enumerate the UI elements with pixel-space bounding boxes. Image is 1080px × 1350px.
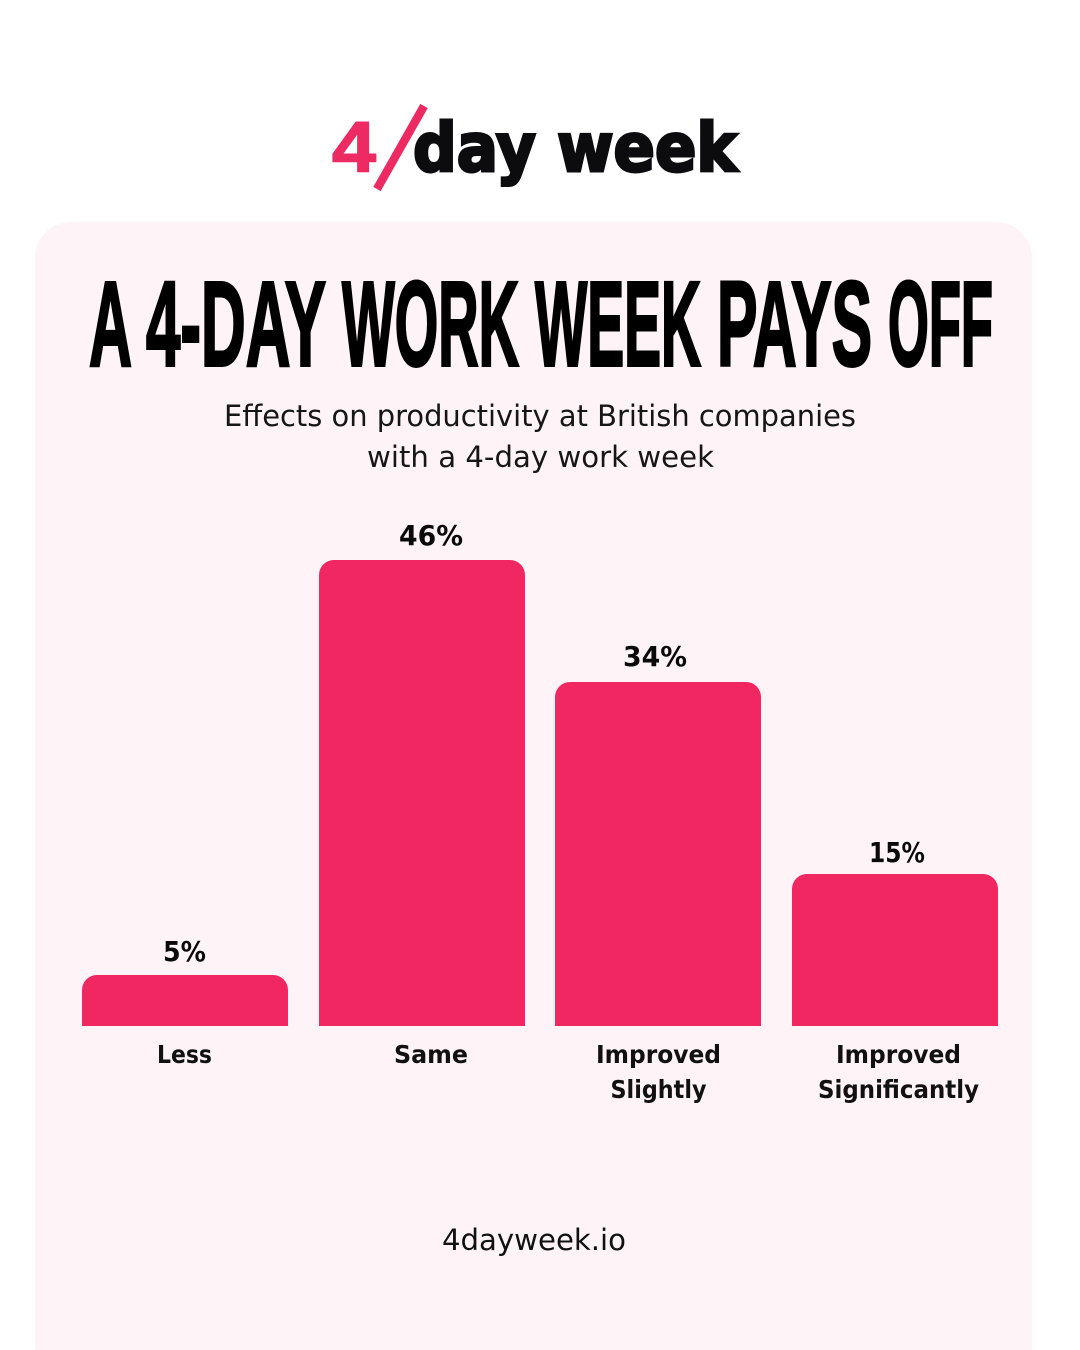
title word: 4-DAY: 4-DAY bbox=[146, 256, 326, 392]
bar: Less 5%: Less bbox=[157, 1040, 212, 1069]
bar chart bbox=[82, 519, 998, 1104]
footer url: 4dayweek.io bbox=[442, 1223, 626, 1257]
bar: Improved Slightly 34%: Slightly bbox=[610, 1075, 706, 1104]
bar: Improved Slightly 34%: Improved bbox=[596, 1040, 721, 1069]
bar: Same 46%: Same bbox=[394, 1040, 468, 1069]
subtitle line 2: with a 4-day work week bbox=[367, 440, 714, 474]
logo numeral 4: 4 bbox=[332, 108, 377, 188]
title: WEEK bbox=[535, 256, 701, 392]
title bbox=[89, 256, 993, 392]
subtitle bbox=[224, 399, 856, 474]
title word: PAYS: PAYS bbox=[717, 256, 872, 392]
subtitle line 1: Effects on productivity at British companies bbox=[224, 399, 856, 433]
bar: Improved Significantly 15% bbox=[792, 836, 998, 1104]
bar: Improved Significantly 15%: Improved bbox=[836, 1040, 961, 1069]
logo wordmark: day week bbox=[413, 109, 738, 187]
logo slash bbox=[377, 106, 424, 189]
panel: background card bbox=[35, 222, 1032, 1350]
bar: Improved Slightly 34%: 34% bbox=[623, 640, 687, 673]
bar: Less 5%: 5% bbox=[163, 935, 206, 968]
bar: Less 5% bbox=[82, 935, 288, 1069]
logo: 4/day week bbox=[332, 106, 738, 189]
title: A bbox=[89, 256, 132, 392]
bar: Same 46%: 46% bbox=[399, 519, 463, 552]
bar: Improved Slightly 34% bbox=[555, 640, 761, 1104]
title: WORK bbox=[342, 256, 519, 392]
bar: Same 46% bbox=[319, 519, 525, 1069]
bar: Improved Significantly 15%: 15% bbox=[869, 836, 925, 869]
bar: Improved Significantly 15%: Significantly bbox=[818, 1075, 979, 1104]
